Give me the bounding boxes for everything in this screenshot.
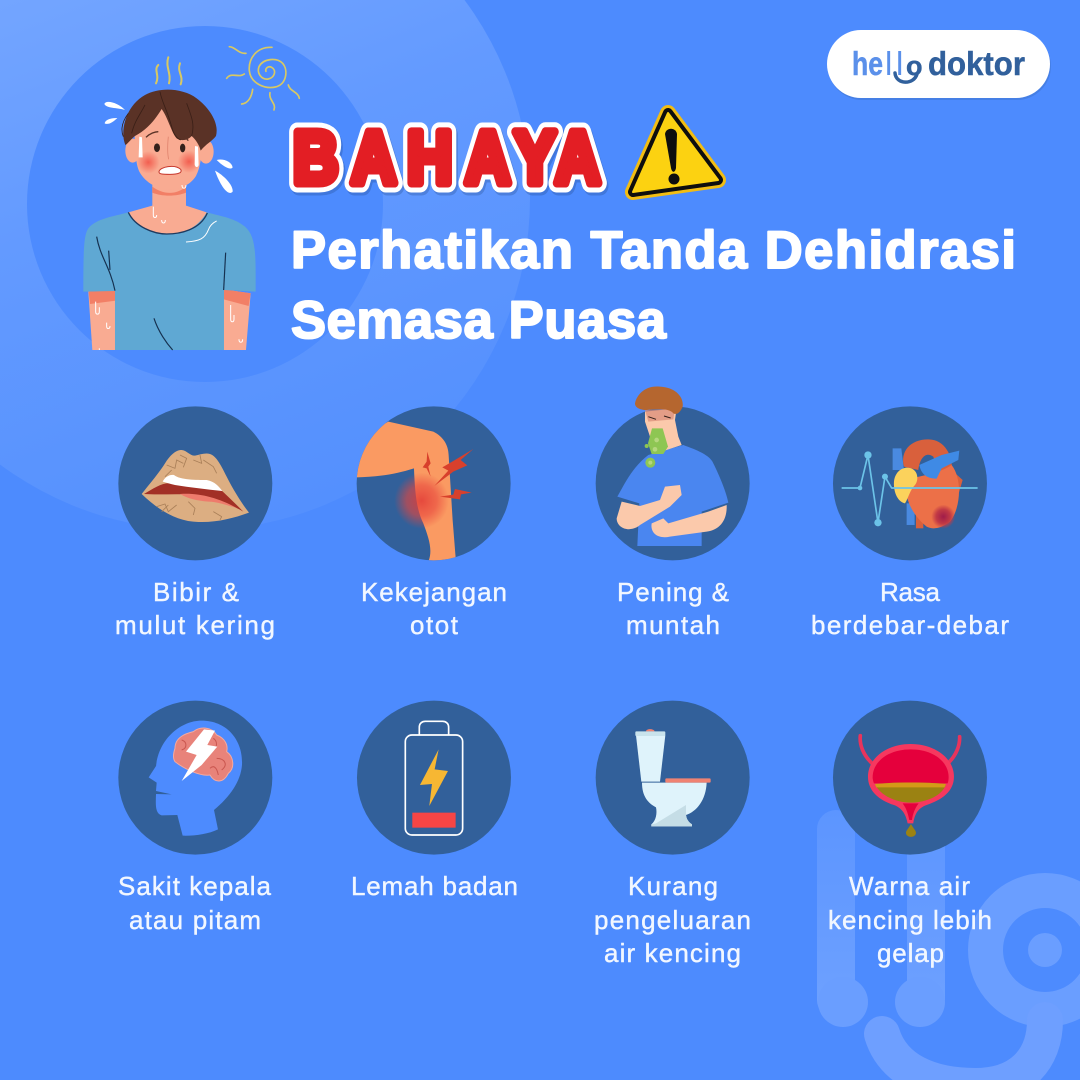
label: Kekejangan	[361, 577, 507, 607]
label: Pening &	[617, 577, 729, 607]
lips	[142, 450, 249, 522]
ears	[125, 139, 140, 163]
arms	[617, 485, 682, 529]
item: dizzy and vomiting	[596, 386, 750, 640]
shirt	[83, 212, 256, 350]
vomit	[645, 428, 668, 468]
head silhouette	[149, 721, 242, 836]
icon circle	[118, 406, 272, 560]
heart body	[905, 465, 959, 528]
label: gelap	[877, 938, 944, 968]
yellow atrium	[894, 468, 917, 503]
sweat drops	[104, 102, 233, 193]
label: Bibir &	[153, 577, 239, 607]
label: Kurang	[628, 871, 718, 901]
item: heart palpitations	[811, 406, 1009, 640]
watermark: logo mark	[818, 829, 1080, 1080]
drop	[906, 824, 916, 837]
arm	[355, 422, 456, 562]
lightning	[182, 729, 217, 781]
item: dark urine	[828, 701, 992, 968]
title: subtitle: Semasa Puasa	[291, 291, 667, 350]
label	[617, 577, 729, 640]
label: mulut kering	[115, 610, 275, 640]
icon circle	[118, 701, 272, 855]
item: muscle cramp	[355, 406, 511, 640]
cheeks	[137, 151, 160, 174]
icon circle	[833, 406, 987, 560]
decorative large circle	[0, 0, 530, 530]
bladder	[868, 744, 954, 823]
brain	[173, 728, 233, 781]
label: berdebar-debar	[811, 610, 1009, 640]
logo wordmark: he	[852, 45, 883, 82]
illustration: sweating man	[83, 47, 299, 350]
item: less urine	[594, 701, 751, 968]
toilet bowl	[642, 783, 707, 826]
hair	[635, 386, 683, 414]
title: BAHAYA: BAHAYA	[295, 119, 602, 202]
label: kencing lebih	[828, 905, 992, 935]
sun	[227, 47, 299, 110]
title: BAHAYA: BAHAYA	[293, 116, 600, 199]
logo wordmark: o	[906, 51, 922, 81]
logo wordmark: doktor	[928, 45, 1025, 82]
heat waves	[156, 57, 182, 84]
logo pill	[828, 32, 1051, 100]
icon circle	[357, 701, 511, 855]
header circle	[27, 26, 383, 382]
icon: warning triangle	[633, 113, 718, 192]
label: Lemah badan	[351, 871, 518, 901]
title: subtitle	[291, 221, 1016, 350]
low charge	[412, 813, 456, 828]
icon circle	[596, 701, 750, 855]
icon circle	[596, 406, 750, 560]
icon circle	[357, 406, 511, 560]
label: atau pitam	[129, 905, 261, 935]
item: weak body	[351, 701, 518, 901]
battery outline	[405, 721, 463, 835]
label: muntah	[626, 610, 720, 640]
mouth	[159, 166, 181, 174]
label	[811, 577, 1009, 640]
label	[361, 577, 507, 640]
damaged area	[931, 505, 955, 529]
item: headache	[118, 701, 272, 935]
pain bolts	[423, 449, 473, 499]
logo wordmark	[852, 45, 1025, 82]
label	[118, 871, 272, 935]
ureters	[860, 736, 960, 763]
label	[828, 871, 992, 968]
label: Rasa	[880, 577, 941, 607]
label: otot	[410, 610, 459, 640]
label	[115, 577, 275, 640]
urine	[875, 782, 946, 803]
cistern	[646, 729, 655, 731]
title: subtitle: Perhatikan Tanda Dehidrasi	[291, 221, 1016, 280]
logo	[827, 30, 1051, 100]
heart vessels	[893, 448, 904, 470]
shirt	[617, 445, 728, 546]
neck and chest	[128, 177, 207, 234]
label: pengeluaran	[594, 905, 751, 935]
label: Sakit kepala	[118, 871, 272, 901]
logo wordmark: ll	[885, 45, 903, 82]
label: Warna air	[849, 871, 970, 901]
hair	[123, 90, 217, 151]
heart arch	[903, 439, 963, 495]
eyes	[154, 143, 160, 152]
face	[135, 108, 202, 189]
item: dry lips	[115, 406, 275, 640]
arms	[88, 292, 117, 350]
bolt	[420, 749, 448, 806]
pulse line	[842, 455, 978, 523]
label	[594, 871, 751, 968]
label: air kencing	[604, 938, 741, 968]
title: BAHAYA: BAHAYA	[293, 116, 600, 199]
toilet seat	[665, 778, 711, 783]
neck and face	[645, 408, 682, 452]
blue aorta	[919, 451, 959, 479]
shirt folds	[97, 237, 226, 350]
icon circle	[833, 701, 987, 855]
